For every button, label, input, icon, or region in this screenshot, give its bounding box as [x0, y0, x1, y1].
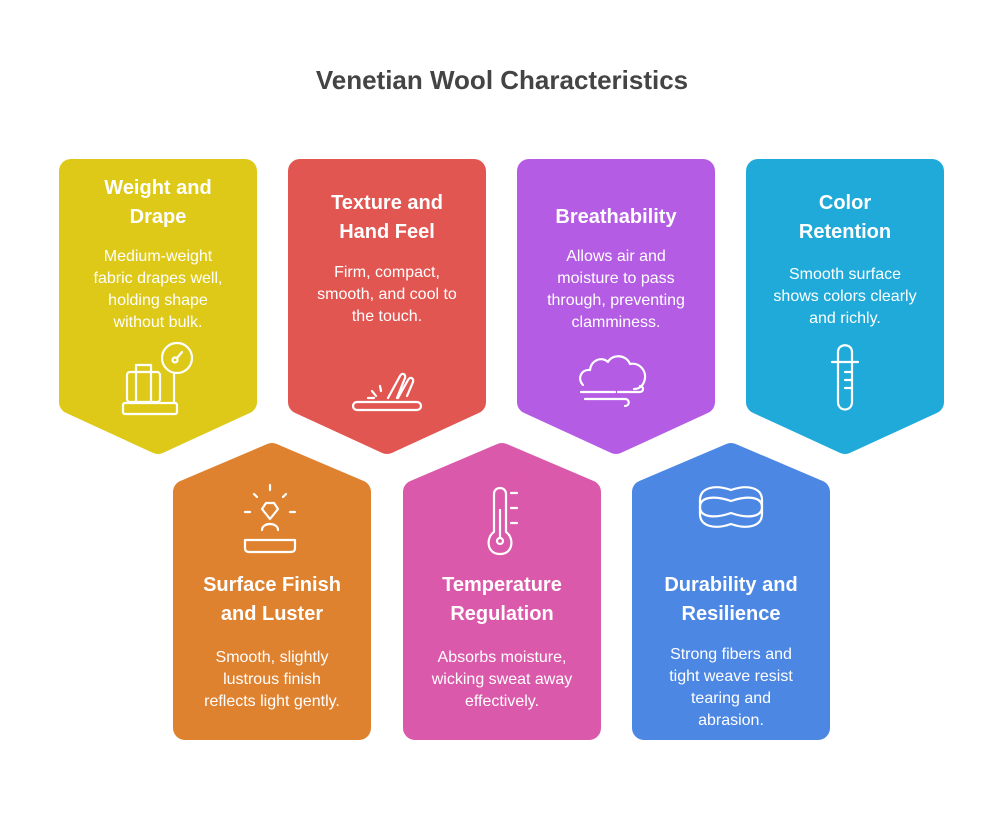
panel: surface finish: and Luster [221, 603, 323, 625]
panel: breathability: clamminess. [572, 314, 660, 331]
panel: durability and resilience: tearing and [691, 690, 771, 707]
panel: temperature regulation: Temperature [442, 574, 562, 596]
panel: breathability: Breathability [555, 206, 677, 228]
panel: weight and drape: Medium-weight [104, 248, 213, 265]
panel: surface finish: reflects light gently. [204, 693, 340, 710]
panel: texture and hand feel: smooth, and cool to [317, 286, 457, 303]
panel: weight and drape: fabric drapes well, [94, 270, 222, 287]
panel: weight and drape: Weight and [104, 177, 212, 199]
icon: cloud wind [580, 356, 645, 406]
icon: thermometer [489, 488, 517, 554]
icon: diamond [245, 485, 295, 552]
panel: texture and hand feel: Hand Feel [339, 221, 435, 243]
panel: breathability: through, preventing [547, 292, 685, 309]
panel: durability and resilience [644, 455, 818, 729]
panel: temperature regulation: Regulation [450, 603, 554, 625]
panel: color retention: and richly. [809, 310, 881, 327]
panel: weight and drape: without bulk. [113, 314, 202, 331]
panel: surface finish: Surface Finish [203, 574, 341, 596]
panel: color retention: shows colors clearly [773, 288, 917, 305]
icon: hand touch [353, 374, 421, 410]
panel: durability and resilience: Strong fibers and [670, 646, 792, 663]
panel: surface finish: Smooth, slightly [216, 649, 328, 666]
panel: texture and hand feel: Firm, compact, [334, 264, 440, 281]
panel: weight and drape [71, 171, 245, 442]
icon: ring [700, 487, 762, 527]
panel: weight and drape: Drape [130, 206, 186, 228]
panel: breathability: Allows air and [566, 248, 666, 265]
panel: texture and hand feel [300, 171, 474, 442]
panel: breathability: moisture to pass [557, 270, 675, 287]
panel: color retention: Retention [799, 221, 891, 243]
icon: scale [123, 343, 192, 414]
panel: temperature regulation: Absorbs moisture, [438, 649, 566, 666]
panel: durability and resilience: Resilience [682, 603, 780, 625]
panel: breathability [529, 171, 703, 442]
panel: surface finish [185, 455, 359, 728]
panel: durability and resilience: tight weave resist [669, 668, 793, 685]
panel: surface finish: lustrous finish [223, 671, 321, 688]
panel: weight and drape: holding shape [108, 292, 208, 309]
panel: texture and hand feel: the touch. [352, 308, 422, 325]
panel: color retention: Smooth surface [789, 266, 901, 283]
panel: durability and resilience: abrasion. [698, 712, 764, 729]
title: Venetian Wool Characteristics [316, 65, 688, 95]
icon: dropper [832, 345, 858, 410]
panel: temperature regulation: effectively. [465, 693, 539, 710]
panel: color retention [758, 171, 932, 442]
panel: color retention: Color [819, 192, 871, 214]
panel: texture and hand feel: Texture and [331, 192, 443, 214]
panel: durability and resilience: Durability and [664, 574, 798, 596]
panel: temperature regulation [415, 455, 589, 728]
panel: temperature regulation: wicking sweat away [431, 671, 572, 688]
